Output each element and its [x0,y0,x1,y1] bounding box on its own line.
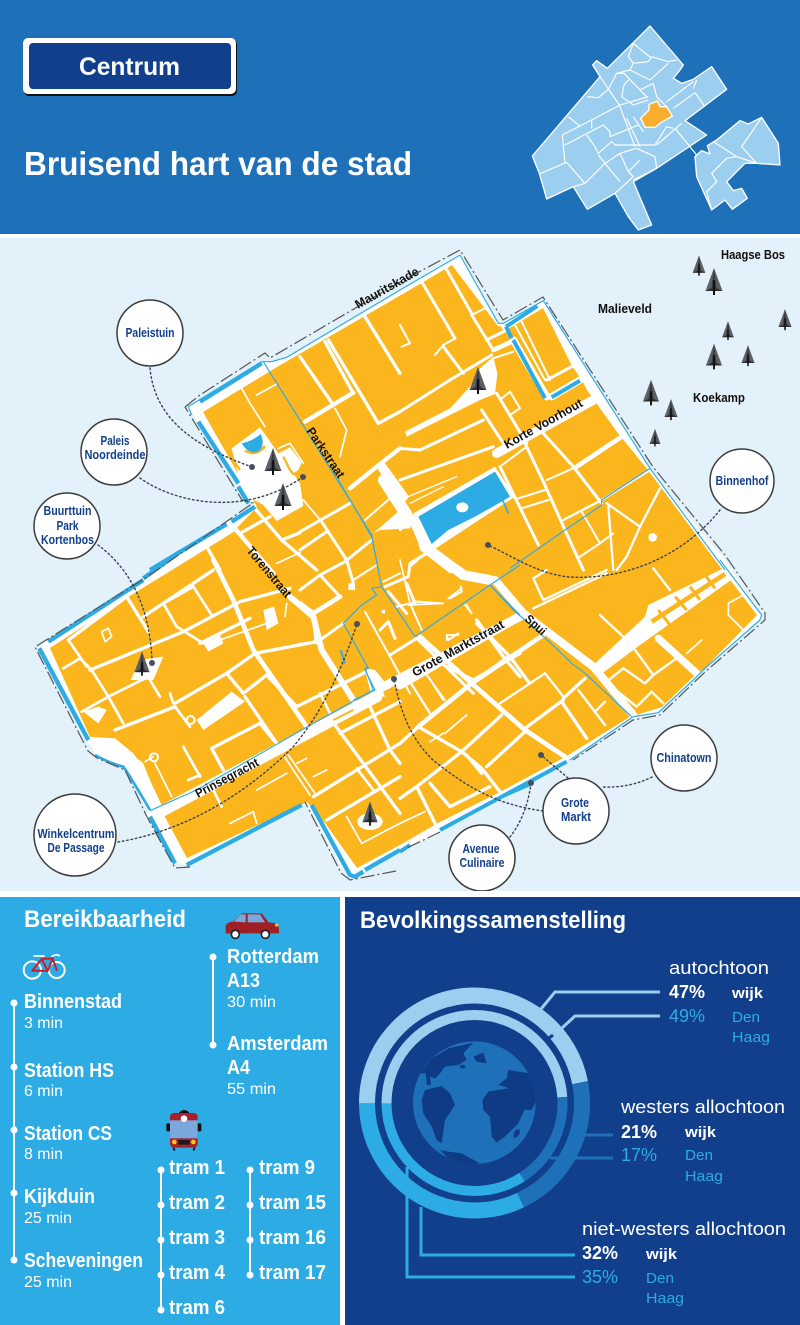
area names: Koekamp [693,391,745,405]
callout: Buurttuin Park Kortenbos [34,493,100,559]
group: niet-westers allochtoon: Haag [646,1290,684,1307]
callout: Buurttuin Park Kortenbos: Park [56,519,79,533]
group: autochtoon [669,958,770,1046]
bicycle destinations timeline: 8 min [24,1146,63,1163]
tram lines list: tram 16 [259,1227,326,1249]
group: autochtoon: wijk [731,985,764,1002]
connector lines [407,992,660,1277]
group: westers allochtoon: wijk [684,1124,717,1141]
bicycle destinations timeline: 6 min [24,1083,63,1100]
group: autochtoon: 49% [669,1006,705,1026]
locator map of The Hague [532,26,780,230]
callout: Paleis Noordeinde: Paleis [100,434,130,448]
panel: Bereikbaarheid (accessibility) [10,906,328,1319]
bicycle destinations timeline: Kijkduin [24,1186,95,1208]
group: autochtoon: autochtoon [669,958,769,978]
group: niet-westers allochtoon: Den [646,1270,674,1287]
donut chart: wijk (outer ring) [367,996,582,1210]
tram lines list: tram 9 [259,1157,315,1179]
group: westers allochtoon: 21% [621,1122,657,1142]
streets: south-west quarter [63,560,400,843]
group: westers allochtoon [620,1097,785,1185]
group: niet-westers allochtoon: 32% [582,1243,618,1263]
callout: Paleistuin: Paleistuin [126,326,174,340]
bicycle destinations timeline [10,991,143,1291]
car destinations timeline: 55 min [227,1081,276,1098]
street names: Torenstraat [244,544,295,601]
icon: car [226,913,279,938]
callout: Grote Markt: Grote [561,796,589,810]
dashed outer boundary [35,250,765,880]
callout: Buurttuin Park Kortenbos: Kortenbos [41,533,94,547]
group: westers allochtoon: Den [685,1147,713,1164]
callout: Paleistuin [117,300,183,366]
tram lines list [158,1157,326,1319]
heading: Bevolkingssamenstelling: Bevolkingssamenstelling [360,907,626,934]
trees [134,256,792,826]
street names [193,264,586,801]
group: autochtoon: Haag [732,1029,770,1046]
callout: Chinatown [651,725,717,791]
bicycle destinations timeline: Station HS [24,1060,114,1082]
icon: tram [166,1110,201,1151]
street names: Parkstraat [304,425,348,481]
car destinations timeline: Amsterdam [227,1033,328,1055]
group: autochtoon: 47% [669,982,705,1002]
tram lines list: tram 17 [259,1262,326,1284]
icon: globe [413,1041,538,1165]
callout: Grote Markt [543,778,609,844]
car destinations timeline: Rotterdam [227,946,319,968]
callout: Paleis Noordeinde: Noordeinde [84,448,146,462]
panel: Bevolkingssamenstelling (population) [360,907,786,1307]
tram lines list: tram 4 [169,1262,226,1284]
group: niet-westers allochtoon: niet-westers allochtoon [582,1219,786,1239]
callout: Binnenhof: Binnenhof [716,474,769,488]
callout: Binnenhof [710,449,774,513]
bicycle destinations timeline: Binnenstad [24,991,122,1013]
street names: Prinsegracht [193,755,262,801]
tram lines list: tram 2 [169,1192,225,1214]
group: westers allochtoon: Haag [685,1168,723,1185]
icon: bicycle [24,955,65,979]
callout: Chinatown: Chinatown [656,751,712,765]
map panel background [0,238,800,891]
callout: Winkelcentrum De Passage: De Passage [48,841,105,855]
bicycle destinations timeline: Scheveningen [24,1250,143,1272]
tram lines list: tram 3 [169,1227,225,1249]
street names: Grote Marktstraat [410,617,507,680]
callout: Grote Markt: Markt [561,810,592,824]
heading: Bereikbaarheid: Bereikbaarheid [24,906,186,933]
white divider and panel backgrounds [0,891,800,1325]
car destinations timeline: A4 [227,1057,251,1079]
bicycle destinations timeline: 25 min [24,1210,72,1227]
leader lines and markers [98,368,720,842]
group: niet-westers allochtoon [582,1219,786,1307]
callout: Avenue Culinaire: Culinaire [460,856,505,870]
streets: north-east quarter [400,267,660,573]
callout: Winkelcentrum De Passage [34,794,116,876]
car destinations timeline: 30 min [227,994,276,1011]
group: westers allochtoon: 17% [621,1145,657,1165]
group: niet-westers allochtoon: wijk [645,1246,678,1263]
car destinations timeline: A13 [227,970,260,992]
streets: centre [300,480,520,700]
bicycle destinations timeline: Station CS [24,1123,112,1145]
tram lines list: tram 6 [169,1297,225,1319]
district name sign: Centrum: Centrum [79,53,180,81]
streets: south-east quarter [400,560,743,827]
bicycle destinations timeline: 25 min [24,1274,72,1291]
group: niet-westers allochtoon: 35% [582,1267,618,1287]
car destinations timeline [210,946,328,1098]
streets: north-west quarter [203,317,403,573]
bicycle destinations timeline: 3 min [24,1015,63,1032]
district boundary line [150,255,762,811]
callout: Paleis Noordeinde [81,419,147,485]
street names: Korte Voorhout [502,396,586,452]
street names: Spui [522,612,549,638]
street names: Mauritskade [353,264,421,312]
canals [39,306,580,877]
callout: Winkelcentrum De Passage: Winkelcentrum [38,827,114,841]
area names [598,248,785,405]
callout: Avenue Culinaire: Avenue [462,842,500,856]
group: autochtoon: Den [732,1009,760,1026]
donut chart: Den Haag (inner ring) [386,1015,562,1191]
tram lines list: tram 1 [169,1157,225,1179]
header band [0,0,800,238]
callout: Avenue Culinaire [449,825,515,891]
group: westers allochtoon: westers allochtoon [620,1097,785,1117]
district name sign: Centrum [23,38,237,96]
title: Bruisend hart van de stad [24,145,412,182]
area names: Malieveld [598,302,652,316]
callout: Buurttuin Park Kortenbos: Buurttuin [44,504,92,518]
tram lines list: tram 15 [259,1192,326,1214]
area names: Haagse Bos [721,248,785,262]
